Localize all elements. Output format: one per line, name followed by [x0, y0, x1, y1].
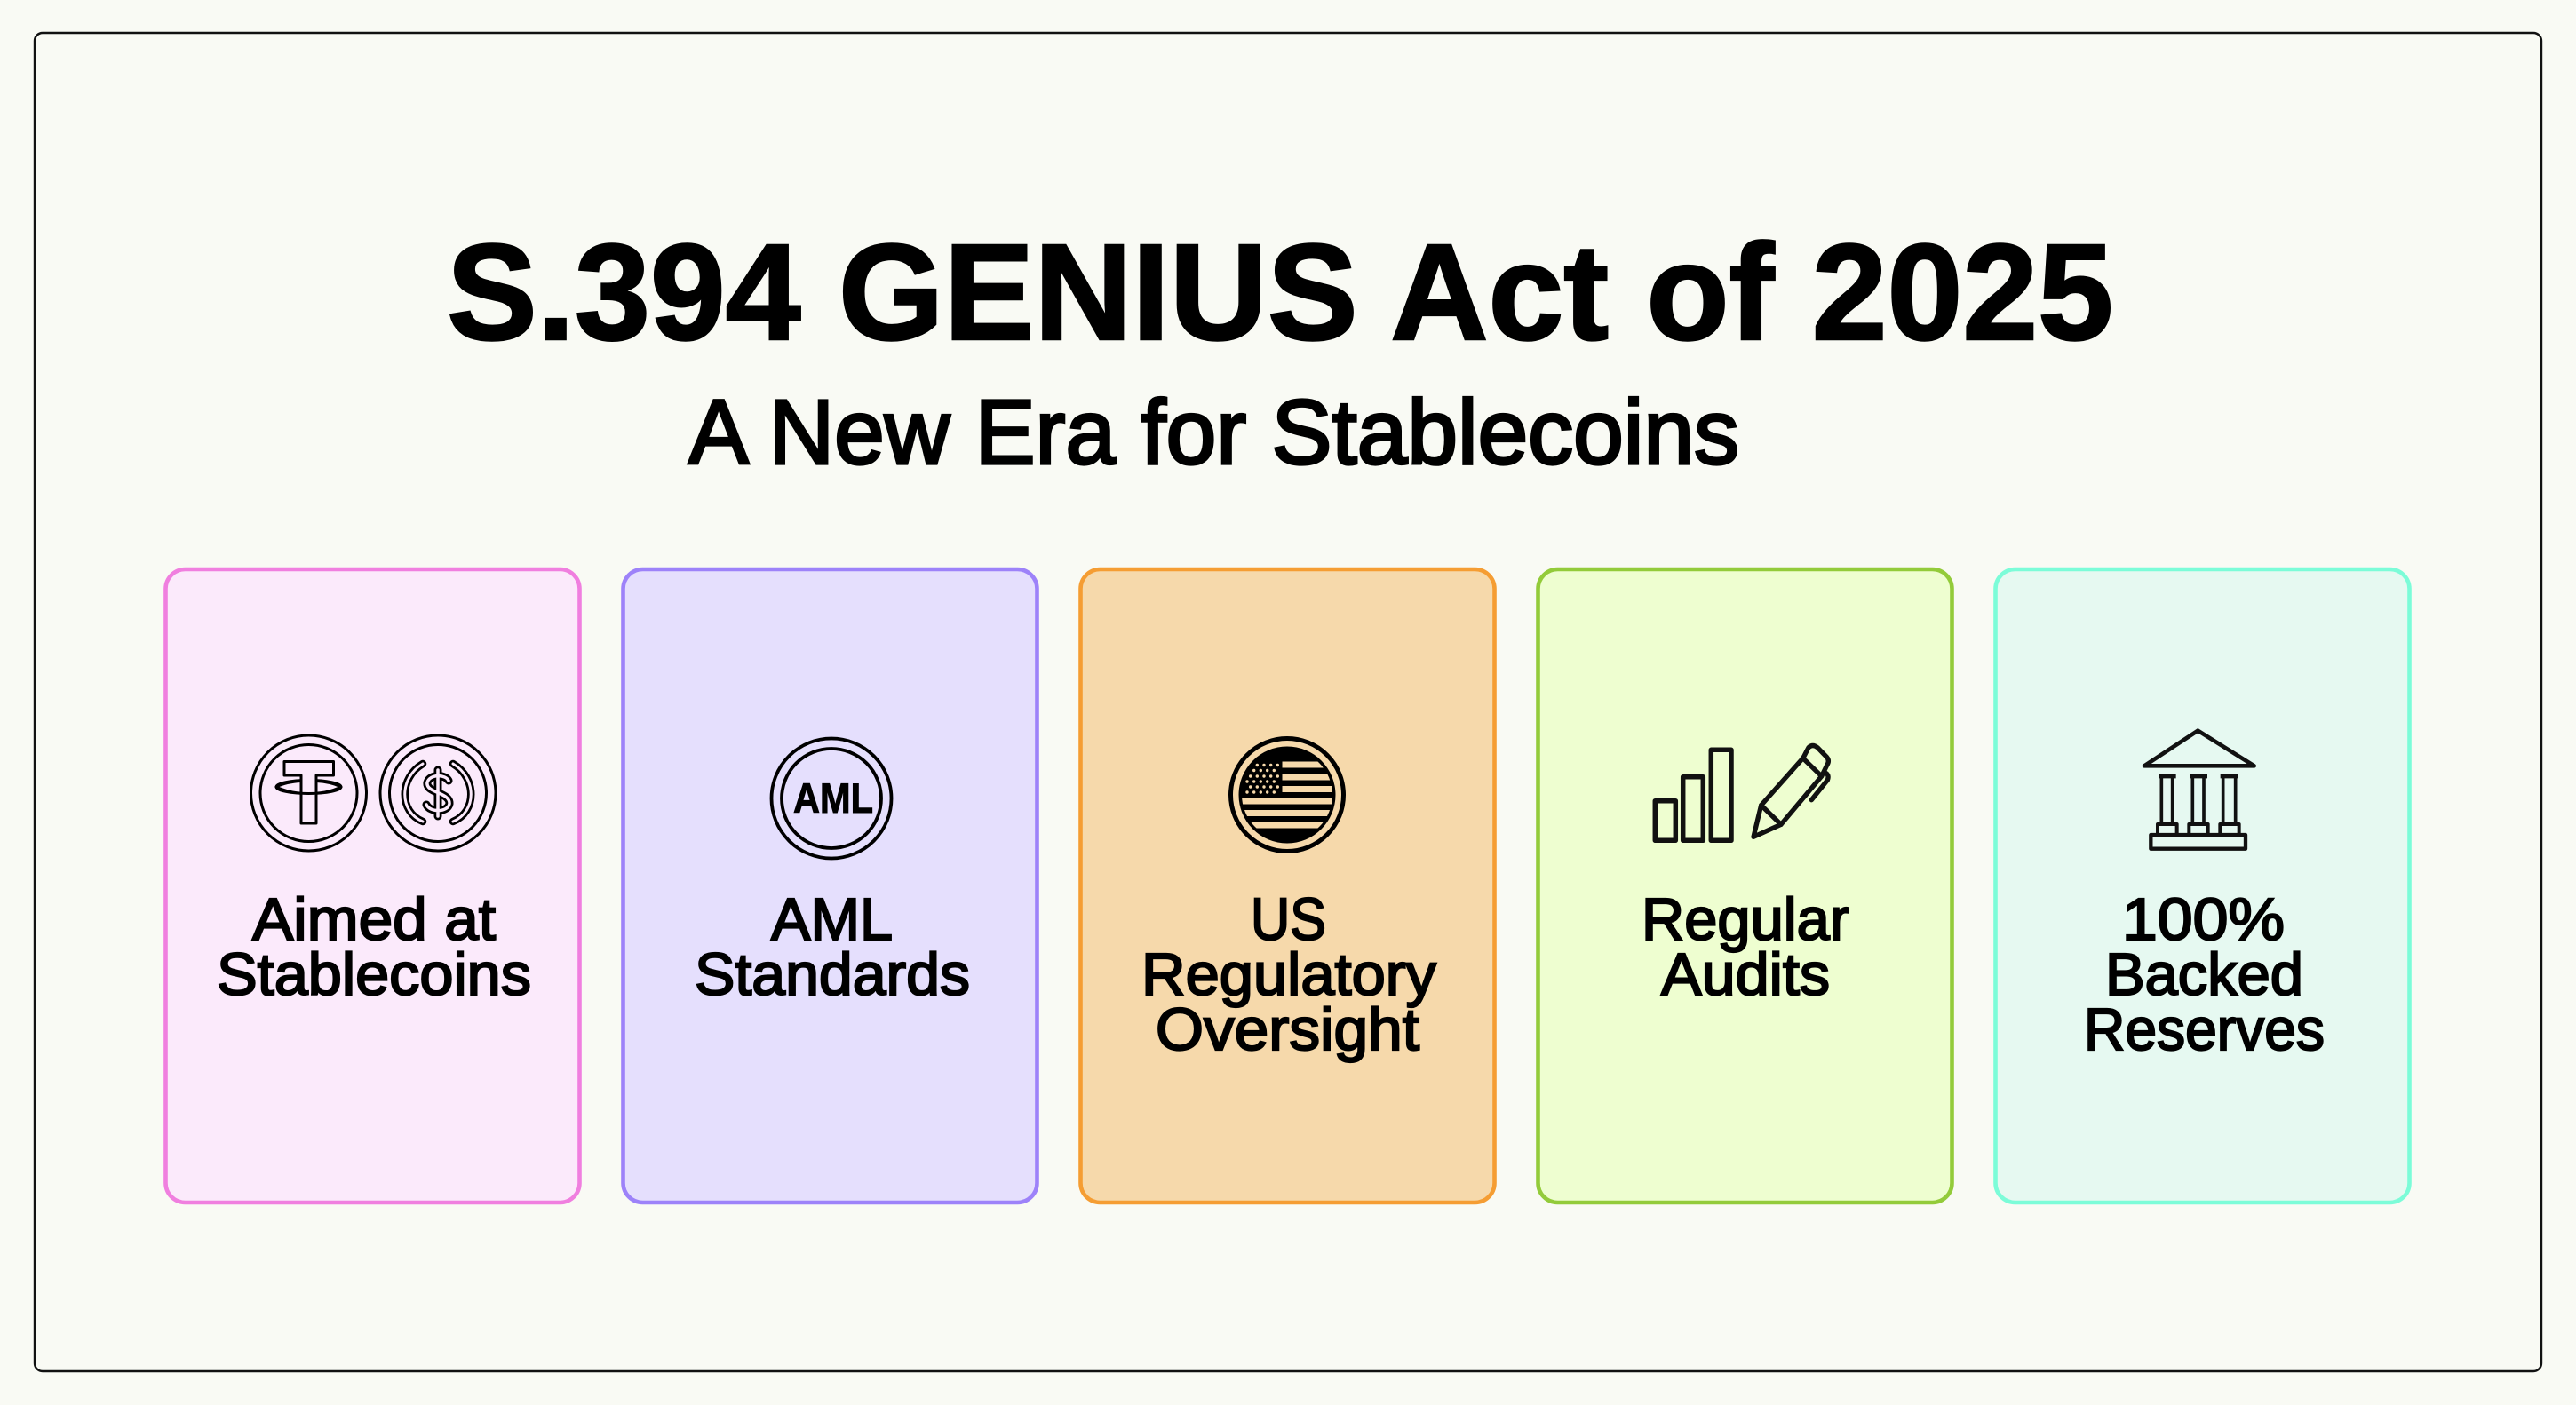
icon: pen [1753, 745, 1828, 837]
label [1141, 886, 1437, 1063]
label [695, 886, 970, 1008]
panel: aml standards [624, 569, 1038, 1203]
panel: regular audits [1538, 569, 1952, 1203]
title: S.394 GENIUS Act of 2025 [447, 216, 2113, 369]
icon: tether coin [250, 735, 366, 851]
label: Regular [1642, 886, 1849, 953]
icon: us flag coin [1231, 739, 1343, 851]
label: Backed [2105, 941, 2303, 1008]
card background [165, 569, 579, 1203]
label: Audits [1661, 941, 1830, 1008]
icon: aml coin [771, 739, 892, 858]
icon: bar chart [1655, 750, 1731, 840]
label: 100% [2122, 886, 2285, 953]
label [217, 886, 531, 1008]
icon: bank building [2144, 731, 2254, 849]
label [2084, 886, 2325, 1063]
icon: aml coin: AML [793, 774, 873, 822]
label: Oversight [1156, 996, 1419, 1063]
label: Stablecoins [217, 941, 531, 1008]
label: Standards [695, 941, 970, 1008]
label [1642, 886, 1849, 1008]
card background [1995, 569, 2409, 1203]
label: Aimed at [252, 886, 496, 953]
label: US [1251, 886, 1326, 953]
card background [624, 569, 1038, 1203]
icon: usdc coin [380, 735, 496, 851]
card background [1080, 569, 1494, 1203]
subtitle: A New Era for Stablecoins [688, 381, 1739, 483]
panel: us regulatory oversight [1080, 569, 1494, 1203]
card background [1538, 569, 1952, 1203]
panel: 100% backed reserves [1995, 569, 2409, 1203]
label: Reserves [2084, 996, 2325, 1063]
label: AML [771, 886, 893, 953]
panel: aimed at stablecoins [165, 569, 579, 1203]
label: Regulatory [1141, 941, 1437, 1008]
